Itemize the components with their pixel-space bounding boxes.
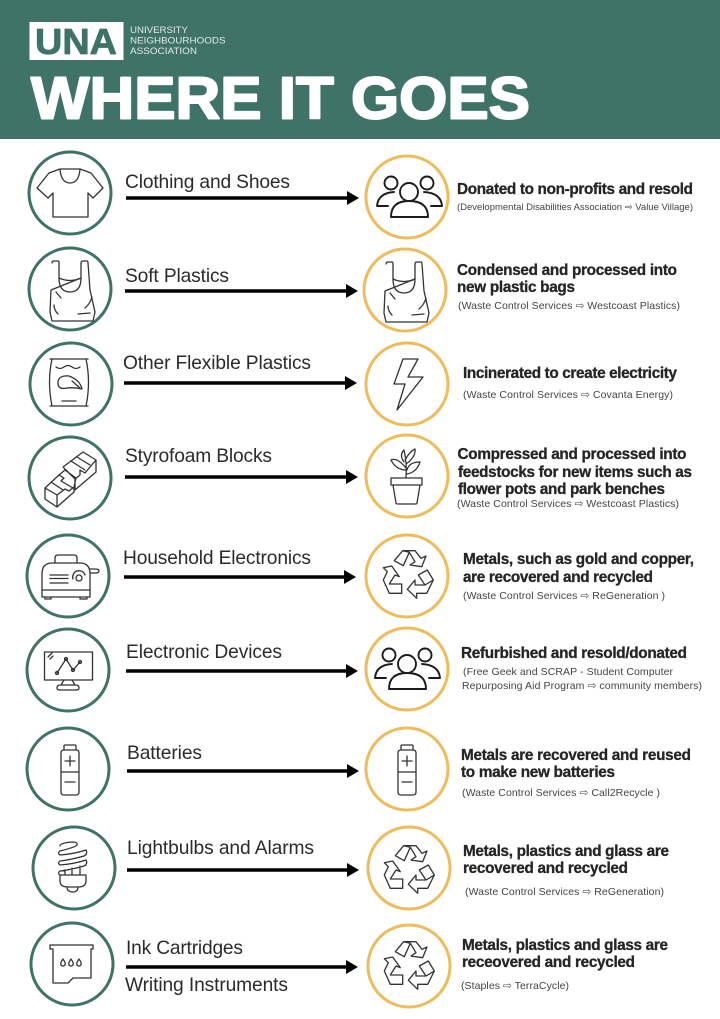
row: electronic devices <box>27 628 702 711</box>
icon: presentation monitor <box>27 629 109 711</box>
arrow <box>126 960 358 974</box>
destination text <box>457 446 692 510</box>
destination text: (Staples ⇨ TerraCycle) <box>461 980 569 992</box>
destination text <box>457 181 693 213</box>
row: other flexible plastics <box>30 343 677 425</box>
logo: UNA: UNA <box>35 21 117 62</box>
label: batteries: Batteries <box>127 743 202 764</box>
icon: spiral lightbulb <box>33 827 115 909</box>
destination text: (Waste Control Services ⇨ ReGeneration ) <box>463 590 665 602</box>
header banner <box>0 0 720 139</box>
destination text: Condensed and processed into <box>457 262 677 279</box>
row: clothing and shoes <box>29 152 693 238</box>
destination text: Metals, such as gold and copper, <box>463 551 694 568</box>
icon: recycling <box>368 827 450 909</box>
destination text: Refurbished and resold/donated <box>461 645 687 662</box>
destination text: Metals are recovered and reused <box>461 747 691 764</box>
icon: recycling <box>366 535 448 617</box>
arrow <box>125 284 358 298</box>
destination text <box>463 843 669 898</box>
arrow <box>127 863 359 877</box>
icon: styrofoam blocks <box>29 437 111 519</box>
icon: battery outcome <box>366 728 448 810</box>
label: clothing and shoes: Clothing and Shoes <box>125 172 290 193</box>
icon: lightning bolt <box>366 343 448 425</box>
logo: UNA <box>30 21 226 62</box>
icon: plastic bag <box>29 248 111 330</box>
row: lightbulbs and alarms <box>33 827 669 909</box>
arrow <box>127 764 359 778</box>
label: other flexible plastics: Other Flexible Plastics <box>123 353 311 374</box>
destination text: (Waste Control Services ⇨ Westcoast Plastics) <box>458 300 680 312</box>
arrow <box>124 570 356 584</box>
icon: t-shirt <box>29 152 111 234</box>
row: styrofoam blocks <box>29 435 692 519</box>
arrow <box>125 470 358 484</box>
row: ink cartridges and writing instruments <box>31 923 668 1007</box>
icon: potted plant <box>366 435 448 517</box>
title: WHERE IT GOES <box>31 66 530 132</box>
logo: UNA: UNIVERSITY <box>130 25 189 36</box>
arrow <box>124 376 357 390</box>
destination text: recovered and recycled <box>463 860 628 877</box>
label: styrofoam blocks: Styrofoam Blocks <box>125 446 272 467</box>
destination text: new plastic bags <box>457 279 575 296</box>
destination text <box>461 747 691 799</box>
label: ink cartridges: Ink Cartridges <box>126 938 243 959</box>
icon: chip bag <box>30 343 112 425</box>
label: lightbulbs and alarms: Lightbulbs and Alarms <box>127 838 314 859</box>
destination text: receovered and recycled <box>462 954 635 971</box>
arrow <box>126 664 358 678</box>
icon: battery <box>27 728 109 810</box>
destination text: flower pots and park benches <box>458 481 665 498</box>
destination text: (Waste Control Services ⇨ Call2Recycle ) <box>462 787 660 799</box>
destination text: (Developmental Disabilities Association ⇨ Value Village) <box>457 202 693 213</box>
row: soft plastics <box>29 248 680 331</box>
destination text: (Free Geek and SCRAP - Student Computer <box>463 666 674 678</box>
icon: people <box>366 628 448 710</box>
icon: plastic bag outcome <box>364 249 446 331</box>
destination text <box>463 551 694 602</box>
destination text: are recovered and recycled <box>463 569 653 586</box>
destination text: (Waste Control Services ⇨ Covanta Energy) <box>463 389 673 401</box>
destination text: Donated to non-profits and resold <box>457 181 693 198</box>
destination text: Compressed and processed into <box>458 446 686 463</box>
row: household electronics <box>27 535 694 617</box>
destination text: Incinerated to create electricity <box>463 365 677 382</box>
destination text: Metals, plastics and glass are <box>463 843 669 860</box>
label: soft plastics: Soft Plastics <box>125 266 229 287</box>
destination text: (Waste Control Services ⇨ Westcoast Plastics) <box>457 498 679 510</box>
logo: UNA: ASSOCIATION <box>130 46 197 57</box>
icon: people <box>366 156 448 238</box>
icon: toaster <box>27 535 109 617</box>
label: electronic devices: Electronic Devices <box>126 642 282 663</box>
destination text <box>457 262 680 312</box>
destination text: feedstocks for new items such as <box>458 464 692 481</box>
destination text <box>463 365 677 401</box>
icon: ink cartridge <box>31 923 113 1005</box>
logo: UNA: NEIGHBOURHOODS <box>130 36 226 46</box>
destination text <box>461 645 702 692</box>
destination text: (Waste Control Services ⇨ ReGeneration) <box>465 886 664 898</box>
destination text: to make new batteries <box>461 764 615 781</box>
destination text <box>461 937 668 992</box>
destination text: Repurposing Aid Program ⇨ community members) <box>462 680 702 692</box>
destination text: Metals, plastics and glass are <box>462 937 668 954</box>
icon: recycling <box>368 925 450 1007</box>
row: batteries <box>27 728 691 810</box>
arrow <box>126 191 359 205</box>
label: writing instruments: Writing Instruments <box>125 975 288 996</box>
label: household electronics: Household Electronics <box>123 548 311 569</box>
